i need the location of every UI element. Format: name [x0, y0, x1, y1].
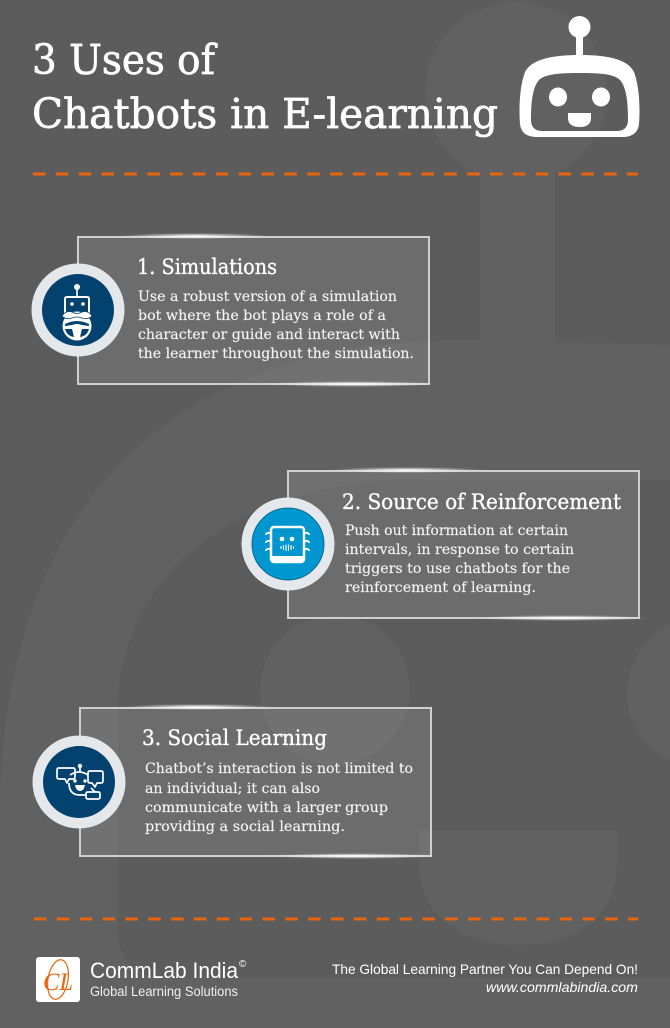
company name	[90, 958, 247, 999]
icon: robot with speech bubbles	[32, 736, 126, 828]
text: simulations body: Use a robust version of a simulation	[138, 289, 397, 305]
logo: CL	[43, 969, 73, 996]
title: 3 Uses of	[32, 36, 218, 84]
text: reinforcement body: Push out information at certain	[345, 523, 568, 539]
tagline	[332, 961, 638, 995]
tagline: www.commlabindia.com	[486, 979, 638, 995]
title: Chatbots in E-learning	[32, 90, 498, 138]
text: social learning body: communicate with a larger group	[145, 800, 388, 816]
text: reinforcement body: intervals, in response to certain	[345, 542, 574, 558]
company name: Global Learning Solutions	[90, 984, 238, 999]
text: reinforcement body: triggers to use chatbots for the	[345, 561, 570, 577]
text: social learning body: providing a social learning.	[145, 819, 345, 835]
company name: ©	[239, 959, 247, 970]
heading: source of reinforcement: 2. Source of Reinforcement	[342, 490, 622, 514]
text: simulations body: character or guide and interact with	[138, 327, 400, 343]
company name: CommLab India	[90, 958, 239, 983]
heading: social learning: 3. Social Learning	[142, 726, 327, 750]
panel: simulations	[32, 233, 438, 387]
icon: robot chip	[242, 498, 334, 590]
text: simulations body	[138, 289, 414, 362]
text: social learning body	[145, 761, 413, 835]
title	[32, 36, 498, 138]
text: social learning body: Chatbot’s interaction is not limited to	[145, 761, 413, 777]
tagline: The Global Learning Partner You Can Depend On!	[332, 961, 638, 977]
text: reinforcement body	[345, 523, 574, 596]
heading: simulations: 1. Simulations	[137, 255, 277, 279]
divider bottom	[34, 918, 638, 920]
divider top	[33, 172, 638, 176]
text: social learning body: an individual; it can also	[145, 781, 320, 797]
logo	[36, 957, 80, 1002]
icon: robot with steering wheel	[32, 264, 124, 356]
panel: source of reinforcement	[242, 467, 648, 621]
text: simulations body: bot where the bot plays a role of a	[138, 308, 386, 324]
icon: robot head	[520, 16, 639, 137]
text: reinforcement body: reinforcement of learning.	[345, 580, 536, 596]
panel: social learning	[32, 704, 440, 859]
text: simulations body: the learner throughout the simulation.	[138, 346, 414, 362]
